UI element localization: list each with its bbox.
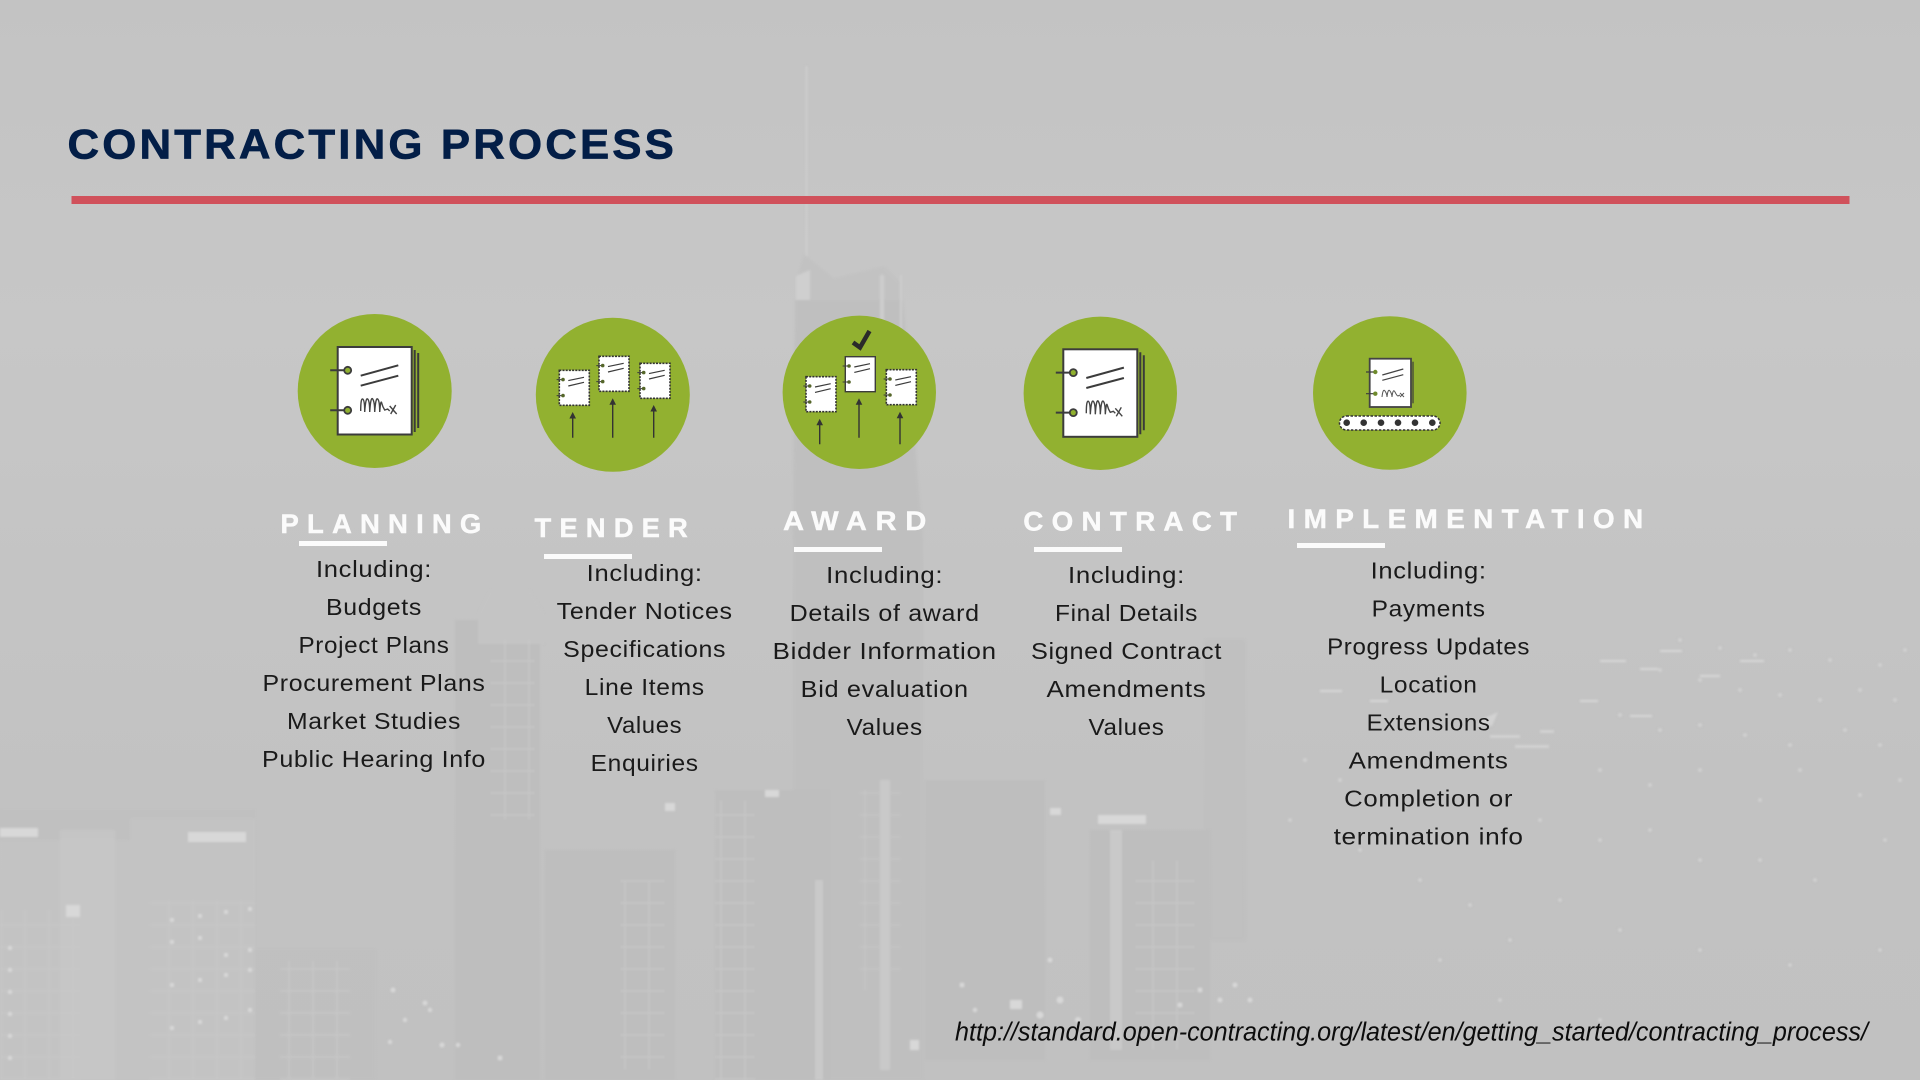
text block: tender items: Including: [587,560,703,586]
text block: planning items: Project Plans [298,632,450,658]
panel: award [773,316,997,740]
red divider rule [72,196,1850,204]
text block: planning items: Market Studies [287,708,461,734]
text block: award items: Bid evaluation [801,676,969,702]
heading underline [1297,543,1385,548]
icon: signed document [298,314,452,468]
text block: implementation items: termination info [1334,824,1524,850]
text block: implementation items: Payments [1372,596,1486,622]
heading underline [794,547,882,552]
text block: implementation items: Progress Updates [1327,634,1530,660]
text block: tender items [557,560,733,776]
heading: award: AWARD [783,506,935,536]
title: CONTRACTING PROCESS [68,120,677,168]
icon: signed contract [1024,317,1177,470]
text block: contract items: Final Details [1055,600,1198,626]
text block: planning items: Budgets [326,594,422,620]
text block: contract items: Amendments [1046,676,1206,702]
heading underline [1034,547,1122,552]
text block: planning items: Procurement Plans [262,670,486,696]
heading: contract: CONTRACT [1023,506,1245,536]
text block: contract items: Signed Contract [1031,638,1222,664]
heading underline [544,554,632,559]
heading: tender: TENDER [534,513,696,543]
text block: tender items: Specifications [563,636,726,662]
text block: award items: Bidder Information [773,638,997,664]
source url: http://standard.open-contracting.org/latest/en/getting_started/contracting_process/ [955,1018,1871,1046]
text block: award items: Details of award [790,600,980,626]
icon: document on conveyor belt [1313,316,1467,470]
text block: implementation items: Amendments [1349,748,1509,774]
icon: selected document with check mark [783,316,936,469]
panel: planning [262,314,490,772]
text block: tender items: Values [607,712,682,738]
heading: implementation: IMPLEMENTATION [1288,504,1652,534]
text block: contract items [1031,562,1222,740]
text block: planning items [262,556,486,772]
text block: implementation items: Extensions [1367,710,1491,736]
text block: implementation items: Including: [1371,558,1487,584]
text block: implementation items: Location [1380,672,1478,698]
text block: contract items: Including: [1068,562,1185,588]
panel: tender [534,318,733,776]
text block: implementation items [1327,558,1530,850]
panel: implementation [1288,316,1652,850]
text block: planning items: Including: [316,556,432,582]
text block: award items: Including: [826,562,943,588]
text block: planning items: Public Hearing Info [262,746,486,772]
icon: three tender documents with arrows [536,318,690,472]
text block: implementation items: Completion or [1344,786,1513,812]
heading: planning: PLANNING [280,509,490,539]
text block: contract items: Values [1088,714,1164,740]
text block: tender items: Enquiries [591,750,699,776]
panel: contract [1023,317,1245,740]
spire and crown of the tall tower [806,66,808,266]
text block: award items: Values [847,714,923,740]
text block: tender items: Tender Notices [557,598,733,624]
text block: tender items: Line Items [585,674,705,700]
text block: award items [773,562,997,740]
heading underline [299,541,387,546]
